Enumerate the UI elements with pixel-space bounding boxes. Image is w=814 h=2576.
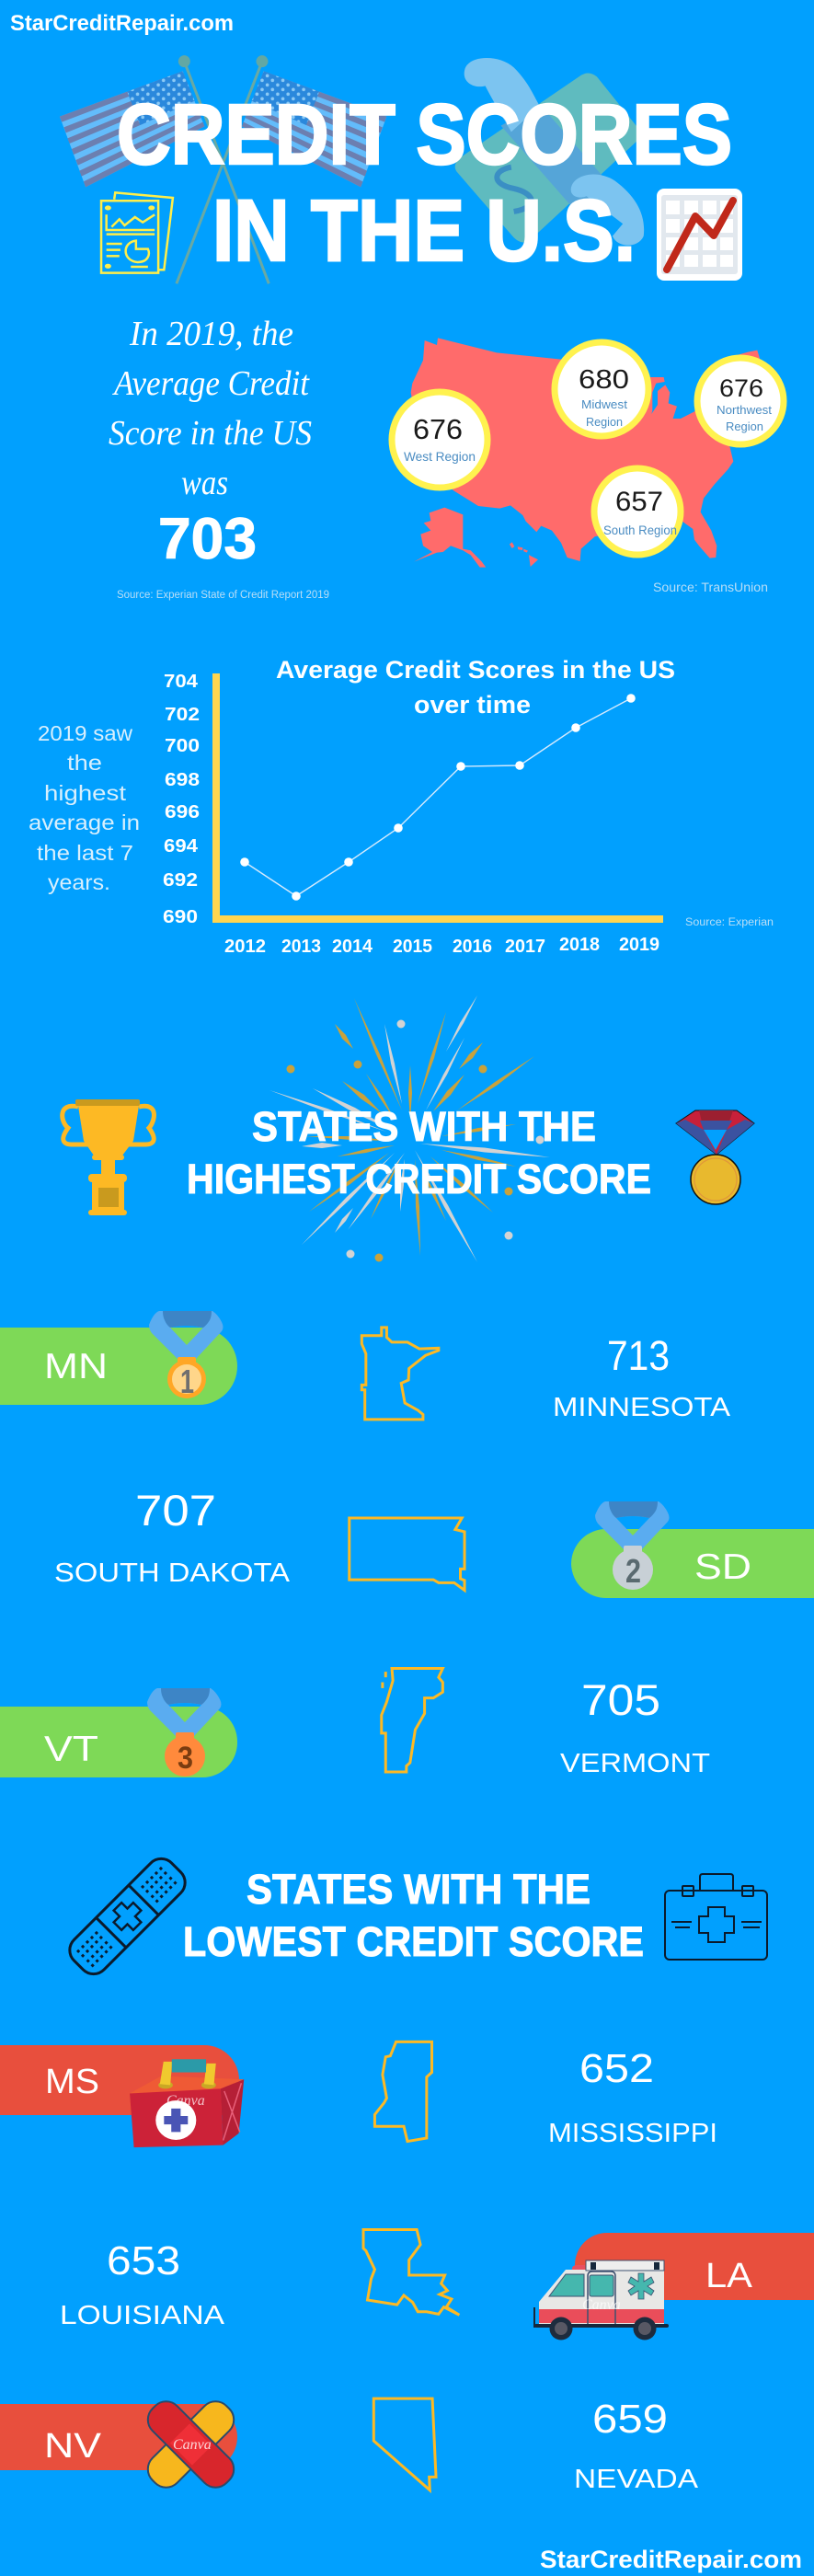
MN label: MN: [44, 1347, 108, 1386]
Mississippi outline: [374, 2041, 431, 2142]
callout: Northwest region: [697, 358, 784, 444]
text: 2019 highest average: average in: [29, 811, 140, 834]
Mississippi name: MISSISSIPPI: [548, 2119, 717, 2148]
x axis labels: [224, 935, 659, 957]
text: 2019 highest average: the last 7: [37, 841, 133, 865]
heading: highest credit score: HIGHEST CREDIT SCORE: [187, 1156, 651, 1202]
icon: crossed bandages: [142, 2395, 240, 2494]
source: Experian report: Source: Experian State of Credit Report 2019: [117, 590, 329, 601]
heading: lowest credit score: STATES WITH THE: [246, 1866, 590, 1913]
text: 2019 highest average: [29, 721, 140, 894]
chart title: Average Credit Scores in the US: [276, 656, 675, 684]
callout: Midwest region: Region: [586, 415, 623, 429]
y axis labels: 696: [165, 802, 200, 822]
x axis labels: 2014: [332, 937, 373, 957]
title: [117, 86, 732, 280]
NV label: NV: [44, 2427, 102, 2466]
text: average score intro: In 2019, the: [129, 315, 293, 353]
VT bar: [0, 1707, 237, 1777]
Mississippi score: 652: [579, 2046, 654, 2091]
text: average score intro: Average Credit: [111, 364, 310, 403]
row: Minnesota: [0, 1311, 731, 1422]
medal 2: [595, 1501, 670, 1590]
Louisiana score: 653: [107, 2238, 180, 2283]
row: Louisiana: [60, 2229, 814, 2340]
x axis labels: 2018: [559, 935, 600, 955]
chart title: [276, 656, 675, 719]
logo footer: StarCreditRepair.com: [540, 2546, 802, 2573]
Vermont name: VERMONT: [560, 1749, 710, 1778]
y axis labels: 694: [164, 836, 199, 857]
callout: Northwest region: Region: [726, 420, 763, 433]
x axis labels: 2017: [505, 937, 545, 957]
callout: West region: 676: [413, 413, 463, 445]
y axis labels: 692: [163, 870, 198, 891]
chart title: over time: [414, 691, 531, 719]
title: CREDIT SCORES: [117, 86, 732, 182]
text: average score intro: [109, 315, 312, 502]
x axis labels: 2019: [619, 935, 659, 955]
text: average score intro: was: [181, 464, 228, 502]
callout: South region: South Region: [603, 523, 677, 537]
Louisiana outline: [363, 2229, 459, 2315]
callout: West region: [392, 392, 487, 488]
text: 2019 highest average: 2019 saw: [38, 721, 132, 745]
callout: Northwest region: Northwest: [717, 403, 772, 417]
row: Vermont: [0, 1669, 710, 1778]
callout: West region: West Region: [404, 449, 476, 464]
icon: red medical box: Canva: [166, 2093, 205, 2109]
y axis labels: 700: [165, 736, 200, 756]
heading: lowest credit score: LOWEST CREDIT SCORE: [183, 1918, 644, 1965]
Nevada score: 659: [592, 2397, 668, 2442]
title: IN THE U.S.: [212, 182, 636, 280]
MS label: MS: [45, 2063, 99, 2101]
Nevada outline: [373, 2398, 436, 2490]
South Dakota name: SOUTH DAKOTA: [54, 1558, 291, 1588]
text: average score intro: Score in the US: [109, 414, 312, 453]
Vermont outline: [382, 1669, 442, 1772]
SD label: SD: [694, 1547, 751, 1587]
Nevada name: NEVADA: [574, 2465, 699, 2494]
Minnesota name: MINNESOTA: [553, 1393, 731, 1422]
US map: [411, 338, 760, 568]
callout: Midwest region: Midwest: [581, 397, 627, 411]
data line: [240, 694, 636, 901]
medal 1: [149, 1311, 223, 1400]
medal 2: 2: [625, 1552, 641, 1590]
callout: Midwest region: [555, 342, 648, 436]
icon: crossed bandages: Canva: [173, 2437, 212, 2453]
y axis labels: 702: [165, 705, 200, 725]
icon: money and scroll: [455, 58, 644, 246]
icon: trophy: [63, 1099, 154, 1215]
x axis labels: 2015: [393, 937, 432, 957]
logo top: StarCreditRepair.com: [10, 11, 234, 36]
icon: crossed American flags: [60, 55, 386, 283]
medal 1: 1: [180, 1363, 194, 1400]
icon: report document: [101, 192, 173, 273]
Louisiana name: LOUISIANA: [60, 2301, 225, 2330]
NV bar: [0, 2404, 237, 2470]
row: Mississippi: [0, 2041, 717, 2148]
y axis labels: 698: [165, 770, 200, 790]
heading: lowest credit score: [183, 1866, 644, 1965]
callout: Midwest region: 680: [579, 365, 629, 395]
icon: gold medal: [676, 1110, 754, 1204]
callout: South region: [594, 468, 681, 555]
icon: bandage: [63, 1853, 191, 1980]
icon: ambulance: [533, 2260, 669, 2340]
Vermont score: 705: [581, 1675, 660, 1724]
icon: red medical box: [130, 2059, 244, 2147]
icon: ambulance: Canva: [582, 2297, 621, 2313]
Minnesota outline: [361, 1328, 439, 1420]
x axis labels: 2013: [281, 937, 321, 957]
y axis labels: 704: [164, 672, 199, 692]
axes: [212, 673, 663, 923]
medal 3: [147, 1688, 221, 1777]
medal 3: 3: [178, 1741, 193, 1776]
South Dakota score: 707: [135, 1486, 216, 1535]
icon: first aid kit outline: [665, 1874, 767, 1960]
callout: Northwest region: 676: [719, 374, 763, 402]
Minnesota score: 713: [607, 1332, 670, 1379]
y axis labels: [163, 672, 200, 927]
SD bar: [571, 1529, 814, 1598]
source: Experian: Source: Experian: [685, 917, 774, 928]
icon: fireworks burst: [269, 995, 550, 1262]
x axis labels: 2016: [453, 937, 492, 957]
heading: highest credit score: [187, 1103, 651, 1202]
text: 2019 highest average: highest: [44, 781, 127, 805]
line chart: average credit scores over time: [163, 656, 774, 957]
VT label: VT: [44, 1730, 98, 1769]
callout: South region: 657: [615, 487, 663, 517]
text: 2019 highest average: years.: [48, 870, 110, 894]
y axis labels: 690: [163, 907, 198, 927]
x axis labels: 2012: [224, 937, 266, 957]
MN bar: [0, 1328, 237, 1405]
source: TransUnion: Source: TransUnion: [653, 581, 768, 594]
LA bar: [575, 2233, 814, 2300]
row: South Dakota: [54, 1486, 814, 1598]
big number 703: 703: [158, 507, 257, 571]
LA label: LA: [705, 2257, 753, 2295]
South Dakota outline: [350, 1518, 464, 1591]
text: 2019 highest average: the: [67, 751, 102, 775]
heading: highest credit score: STATES WITH THE: [252, 1103, 596, 1150]
icon: rising chart: [657, 189, 742, 281]
row: Nevada: [0, 2395, 699, 2494]
MS bar: [0, 2045, 239, 2115]
